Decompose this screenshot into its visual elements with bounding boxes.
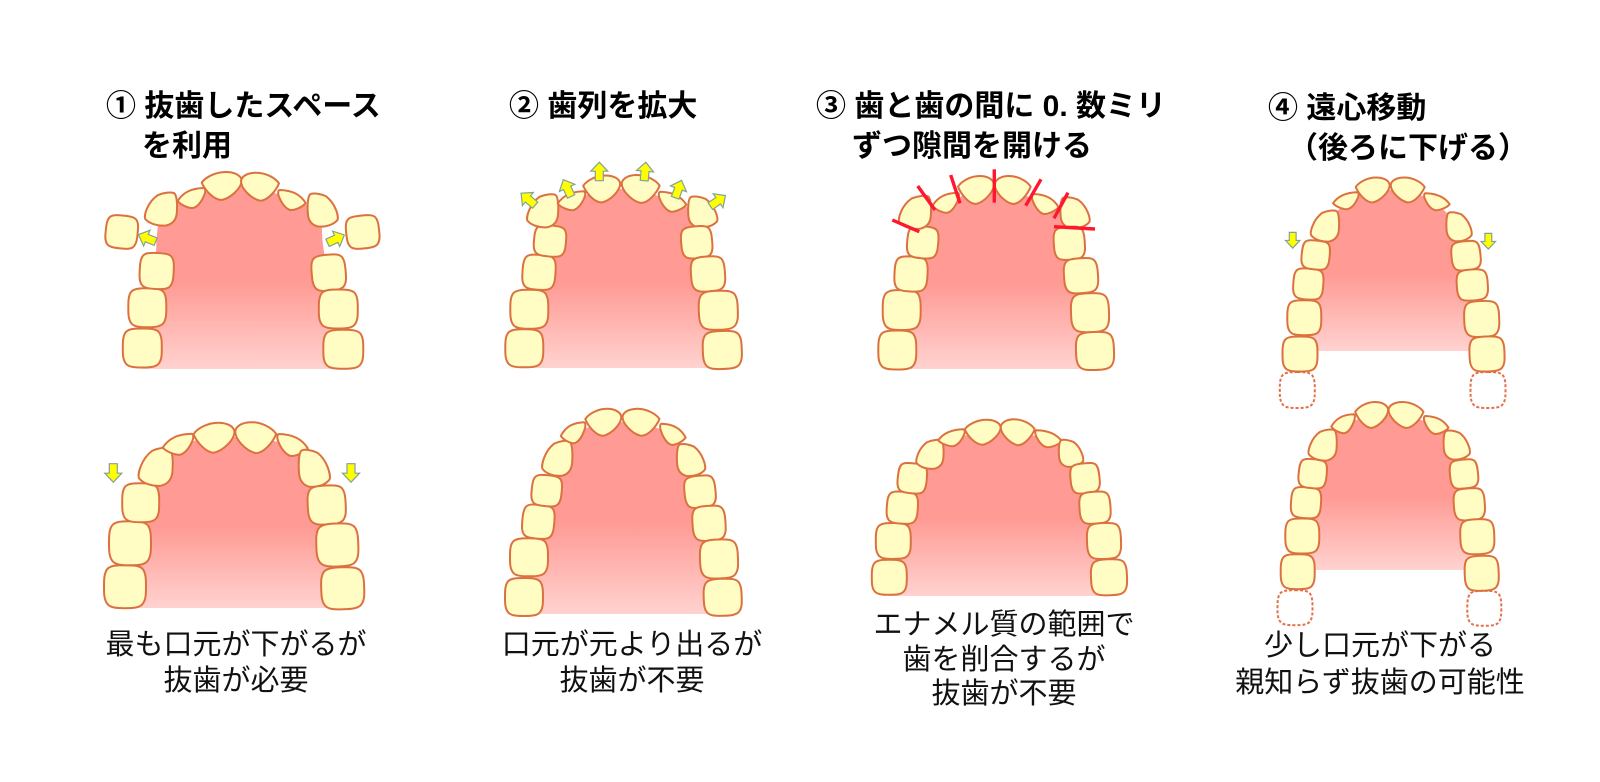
upper arch: before (878, 169, 1115, 371)
teeth (505, 409, 742, 616)
palate (142, 186, 343, 369)
title: method 1: ① 抜歯したスペース (106, 90, 381, 123)
caption: 少し口元が下がる (1264, 629, 1496, 662)
palate (1300, 190, 1487, 351)
arrows: expansion (516, 161, 730, 213)
teeth (104, 422, 365, 610)
caption: エナメル質の範囲で (873, 608, 1135, 641)
arrows: retraction (105, 464, 360, 482)
title: method 1: を利用 (142, 130, 232, 163)
caption: 歯を削合するが (902, 643, 1106, 676)
caption: 抜歯が必要 (163, 664, 309, 697)
caption: 最も口元が下がるが (105, 628, 367, 661)
teeth (872, 419, 1128, 596)
caption: 口元が元より出るが (502, 628, 762, 661)
title: method 3: ずつ隙間を開ける (852, 130, 1092, 163)
panel: 4 distalization (1235, 92, 1528, 699)
title: method 4: （後ろに下げる） (1288, 132, 1528, 165)
arrows: close gap (135, 227, 348, 251)
panel: 2 widening the arch (502, 90, 762, 697)
title: method 4: ④ 遠心移動 (1268, 92, 1426, 125)
arrows: move back (1285, 232, 1496, 249)
palate (524, 189, 722, 368)
palate (125, 437, 343, 608)
teeth (1280, 178, 1506, 408)
teeth (1278, 402, 1501, 626)
lower arch: result (104, 422, 365, 610)
panel: 1 extraction space (104, 90, 381, 697)
upper arch: before (1280, 178, 1506, 408)
panel: 3 interproximal reduction (816, 90, 1166, 710)
lower arch: result (872, 419, 1128, 596)
palate (1298, 415, 1482, 570)
lower arch: result (505, 409, 742, 616)
upper arch: before (505, 161, 742, 370)
upper arch: before (104, 172, 381, 369)
title: method 2: ② 歯列を拡大 (509, 90, 697, 123)
palate (524, 422, 723, 614)
lower arch: result (1278, 402, 1501, 626)
teeth (104, 172, 381, 369)
palate (889, 432, 1109, 596)
teeth (878, 176, 1115, 371)
title: method 3: ③ 歯と歯の間に 0. 数ミリ (816, 90, 1166, 123)
caption: 親知らず抜歯の可能性 (1235, 666, 1525, 699)
caption: 抜歯が不要 (931, 677, 1077, 710)
teeth (505, 175, 742, 370)
caption: 抜歯が不要 (559, 664, 705, 697)
palate (897, 190, 1095, 369)
red cut lines (892, 169, 1095, 232)
